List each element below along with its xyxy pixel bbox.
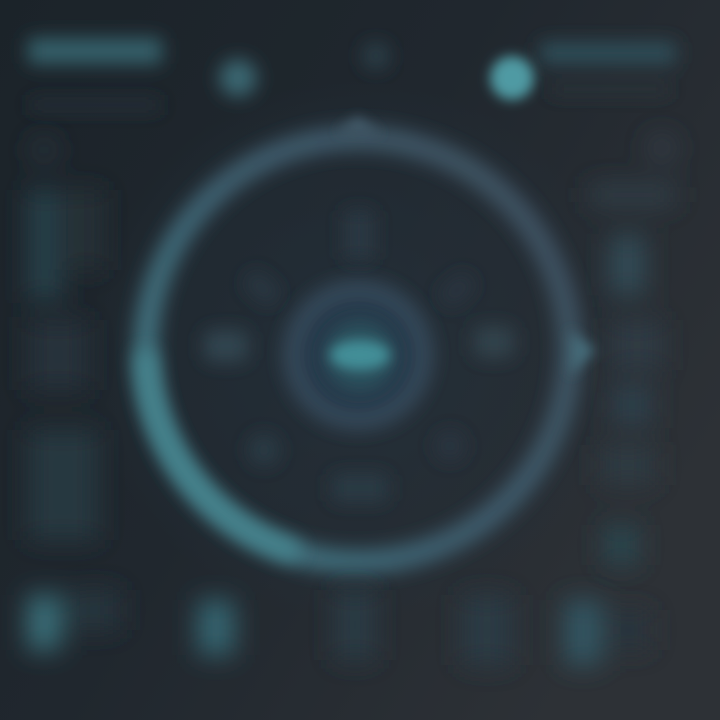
ring: teal lower left arc <box>146 360 290 550</box>
bottom row of panels <box>28 590 650 665</box>
heading: top left <box>28 38 162 110</box>
panel: right column <box>590 134 676 565</box>
node: upper left <box>243 269 281 307</box>
node: left <box>204 330 248 362</box>
node: lower left <box>248 434 280 466</box>
spokes and satellite nodes <box>204 210 514 502</box>
ring: top apex marker <box>336 116 382 134</box>
icon: top center dot <box>362 42 390 70</box>
ring: right marker <box>570 330 596 376</box>
ring: main stroke <box>146 138 570 562</box>
node: upper right <box>438 271 476 309</box>
hub: core <box>324 320 396 392</box>
heading: top right <box>540 42 676 94</box>
node: top <box>344 210 374 260</box>
center hub <box>292 289 424 421</box>
icon: top left dot <box>219 59 257 97</box>
node: lower right <box>435 431 465 461</box>
node: right <box>474 326 514 358</box>
panel: left column <box>28 137 102 540</box>
circular ring <box>146 116 596 562</box>
hub: outer ring <box>292 289 424 421</box>
icon: top right dot <box>490 56 534 100</box>
node: bottom <box>332 474 388 502</box>
hub: bright label <box>330 340 390 370</box>
